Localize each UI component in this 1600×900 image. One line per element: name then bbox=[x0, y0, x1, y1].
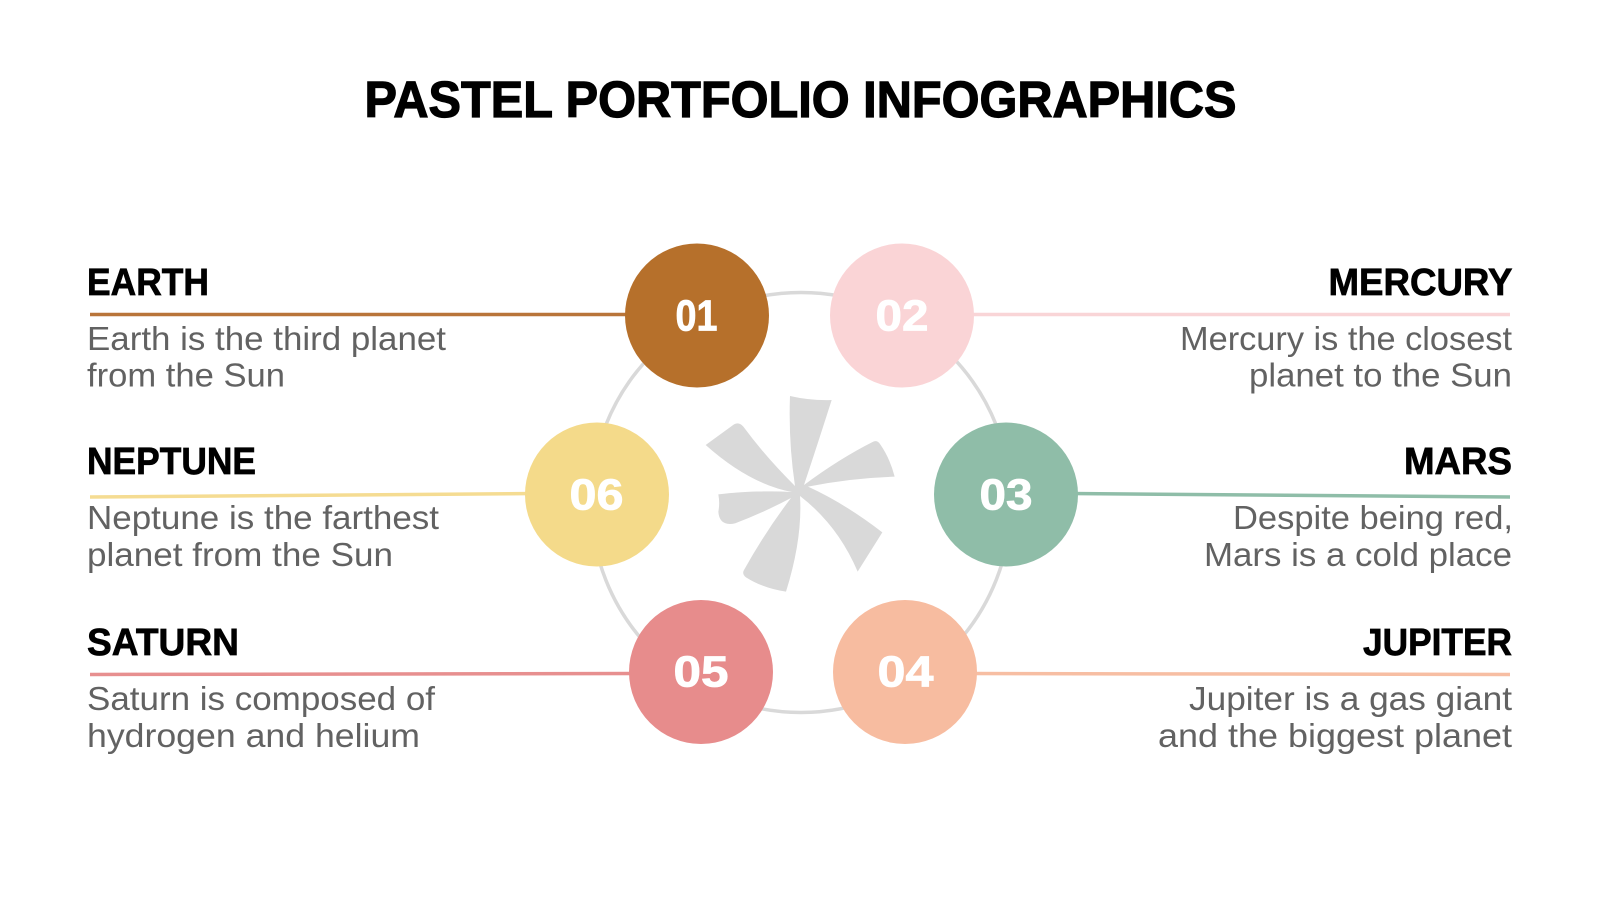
jupiter number badge bbox=[833, 600, 977, 744]
panel: jupiter bbox=[833, 600, 1512, 754]
mars description: Mars is a cold place bbox=[1204, 536, 1512, 573]
earth description bbox=[87, 320, 446, 394]
central ring bbox=[591, 292, 1011, 712]
earth connector line bbox=[90, 313, 630, 316]
saturn description: hydrogen and helium bbox=[87, 717, 420, 754]
mars heading: MARS bbox=[1404, 441, 1512, 483]
mars connector line bbox=[1070, 494, 1510, 497]
mars description: Despite being red, bbox=[1233, 499, 1513, 536]
title: PASTEL PORTFOLIO INFOGRAPHICS bbox=[364, 71, 1236, 128]
neptune description: Neptune is the farthest bbox=[87, 499, 439, 536]
mercury connector line bbox=[970, 313, 1510, 316]
neptune connector line bbox=[90, 494, 535, 497]
jupiter connector line bbox=[970, 674, 1510, 675]
saturn number badge bbox=[629, 600, 773, 744]
mars number badge: 03 bbox=[980, 470, 1032, 520]
mercury heading: MERCURY bbox=[1328, 262, 1512, 304]
neptune heading: NEPTUNE bbox=[87, 441, 256, 483]
jupiter heading: JUPITER bbox=[1363, 622, 1512, 664]
jupiter number badge: 04 bbox=[878, 648, 934, 696]
mercury number badge: 02 bbox=[876, 292, 928, 340]
jupiter description bbox=[1158, 680, 1512, 754]
neptune number badge bbox=[525, 422, 669, 566]
panel: earth bbox=[87, 244, 769, 394]
jupiter description: and the biggest planet bbox=[1158, 717, 1512, 754]
saturn connector line bbox=[90, 674, 640, 675]
mars description bbox=[1204, 499, 1513, 573]
mars number badge bbox=[934, 422, 1078, 566]
panel: neptune bbox=[87, 422, 669, 573]
saturn number badge: 05 bbox=[674, 648, 728, 696]
mercury description: planet to the Sun bbox=[1249, 356, 1512, 394]
mercury description bbox=[1180, 320, 1512, 394]
panel: mercury bbox=[830, 244, 1512, 394]
saturn heading: SATURN bbox=[87, 622, 239, 664]
neptune number badge: 06 bbox=[570, 470, 624, 520]
jupiter description: Jupiter is a gas giant bbox=[1189, 680, 1512, 717]
neptune description bbox=[87, 499, 439, 573]
earth description: from the Sun bbox=[87, 356, 285, 394]
earth number badge bbox=[625, 244, 769, 388]
panel: mars bbox=[934, 422, 1513, 573]
earth heading: EARTH bbox=[87, 262, 209, 304]
neptune description: planet from the Sun bbox=[87, 536, 393, 573]
earth number badge: 01 bbox=[676, 292, 718, 340]
icon: central pinwheel star bbox=[706, 396, 895, 592]
mercury number badge bbox=[830, 244, 974, 388]
earth description: Earth is the third planet bbox=[87, 320, 446, 357]
saturn description: Saturn is composed of bbox=[87, 680, 436, 717]
panel: saturn bbox=[87, 600, 773, 754]
mercury description: Mercury is the closest bbox=[1180, 320, 1512, 357]
saturn description bbox=[87, 680, 436, 754]
